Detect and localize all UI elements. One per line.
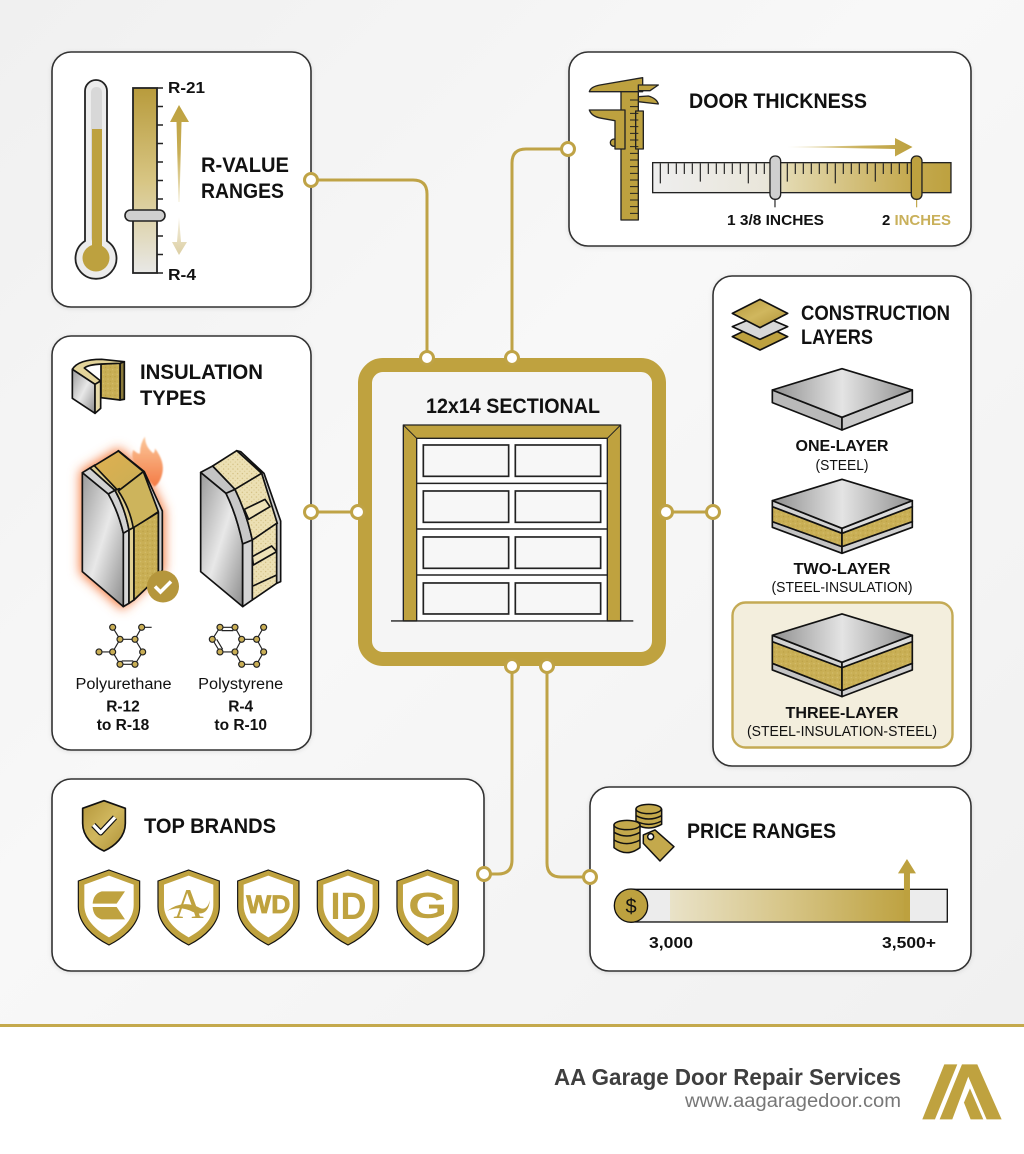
- panel: door thickness: [569, 52, 971, 246]
- text: two-layer: (STEEL-INSULATION): [772, 580, 912, 596]
- arrow up: [170, 105, 189, 202]
- panel: top brands: [52, 779, 484, 971]
- label: 3,500+: 3,500+: [882, 935, 936, 952]
- illustration: garage door: [391, 425, 633, 621]
- text: polystyrene: to R-10: [214, 717, 267, 734]
- footer company name: AA Garage Door Repair Services: [554, 1064, 901, 1090]
- panel: R-value ranges: [52, 52, 311, 307]
- brand badge: chevron logo: [78, 870, 140, 945]
- scale gauge: [125, 88, 165, 273]
- icon: thermometer: [76, 80, 116, 279]
- center panel: 12x14 sectional: [365, 365, 659, 659]
- icon: shield check: [83, 801, 125, 851]
- icon: polystyrene molecule: [209, 624, 267, 667]
- icon: caliper: [589, 78, 658, 220]
- illustration: one-layer plate: [772, 369, 912, 430]
- illustration: two-layer plate: [772, 479, 912, 553]
- illustration: three-layer plate: [772, 614, 912, 697]
- brand badge: ID: ID: [330, 886, 366, 928]
- text: three-layer: THREE-LAYER: [786, 705, 899, 722]
- heading: insulation types: [140, 361, 263, 410]
- panel: construction layers: [713, 276, 971, 766]
- heading: R-value ranges: R-VALUE: [201, 154, 289, 177]
- text: two-layer: [772, 561, 912, 596]
- text: two-layer: TWO-LAYER: [794, 561, 891, 578]
- brand badge: ID: [317, 870, 379, 945]
- footer: [0, 1024, 1024, 1154]
- heading: construction layers: [801, 302, 950, 349]
- footer logo: [922, 1064, 1002, 1119]
- text: three-layer: [747, 705, 937, 740]
- heading: construction layers: LAYERS: [801, 326, 873, 349]
- heading: R-value ranges: [201, 154, 289, 203]
- icon: check badge: [147, 570, 179, 602]
- panel: price ranges: [590, 787, 971, 971]
- connector nodes: [304, 142, 720, 884]
- label R-4: R-4: [168, 267, 196, 284]
- text: polyurethane: Polyurethane: [76, 676, 172, 693]
- icon: coins and tag: [614, 804, 674, 861]
- arrow: thickness direction: [787, 138, 912, 156]
- illustration: polystyrene panel: [201, 451, 281, 607]
- text: polystyrene: [198, 676, 283, 734]
- text: polystyrene: R-4: [228, 698, 254, 716]
- text: polyurethane: R-12: [106, 698, 140, 716]
- highlight: three-layer card: [732, 602, 952, 748]
- label: 1 3/8 inches: 1 3/8 INCHES: [727, 212, 824, 229]
- heading: door thickness: DOOR THICKNESS: [689, 90, 867, 113]
- heading: top brands: TOP BRANDS: [144, 815, 276, 838]
- connector lines: [311, 149, 713, 877]
- label: 3,000: 3,000: [649, 935, 693, 952]
- icon: insulation cutaway: [72, 359, 124, 413]
- text: polystyrene: Polystyrene: [198, 676, 283, 693]
- ruler gauge: [653, 156, 951, 207]
- heading: 12x14 sectional: 12x14 SECTIONAL: [426, 395, 600, 418]
- price bar: [614, 859, 947, 922]
- heading: R-value ranges: RANGES: [201, 180, 284, 203]
- illustration: polyurethane panel: [82, 437, 163, 607]
- icon: layers: [732, 299, 788, 350]
- text: polyurethane: to R-18: [97, 717, 150, 734]
- icon: polyurethane molecule: [96, 624, 152, 667]
- brand badge: WD: WD: [246, 891, 290, 919]
- panel: insulation types: [52, 336, 311, 750]
- brand badge: G: [397, 870, 458, 945]
- text: polyurethane: [76, 676, 172, 734]
- heading: insulation types: INSULATION: [140, 361, 263, 384]
- label: 2 inches: 2 INCHES: [882, 212, 951, 229]
- heading: price ranges: PRICE RANGES: [687, 820, 836, 843]
- text: one-layer: ONE-LAYER: [796, 438, 889, 455]
- heading: insulation types: TYPES: [140, 387, 206, 410]
- text: one-layer: (STEEL): [816, 458, 868, 474]
- arrow down: [172, 217, 187, 255]
- label R-21: R-21: [168, 80, 205, 97]
- text: three-layer: (STEEL-INSULATION-STEEL): [747, 724, 937, 740]
- icon: dollar sign: $: [625, 896, 637, 918]
- brand badge: G: G: [408, 885, 447, 926]
- text: one-layer: [796, 438, 889, 474]
- footer website: www.aagaragedoor.com: [684, 1091, 901, 1112]
- brand badge: WD: [238, 870, 299, 945]
- heading: construction layers: CONSTRUCTION: [801, 302, 950, 325]
- brand badge: A: A: [173, 882, 204, 928]
- brand badge: A: [158, 870, 219, 945]
